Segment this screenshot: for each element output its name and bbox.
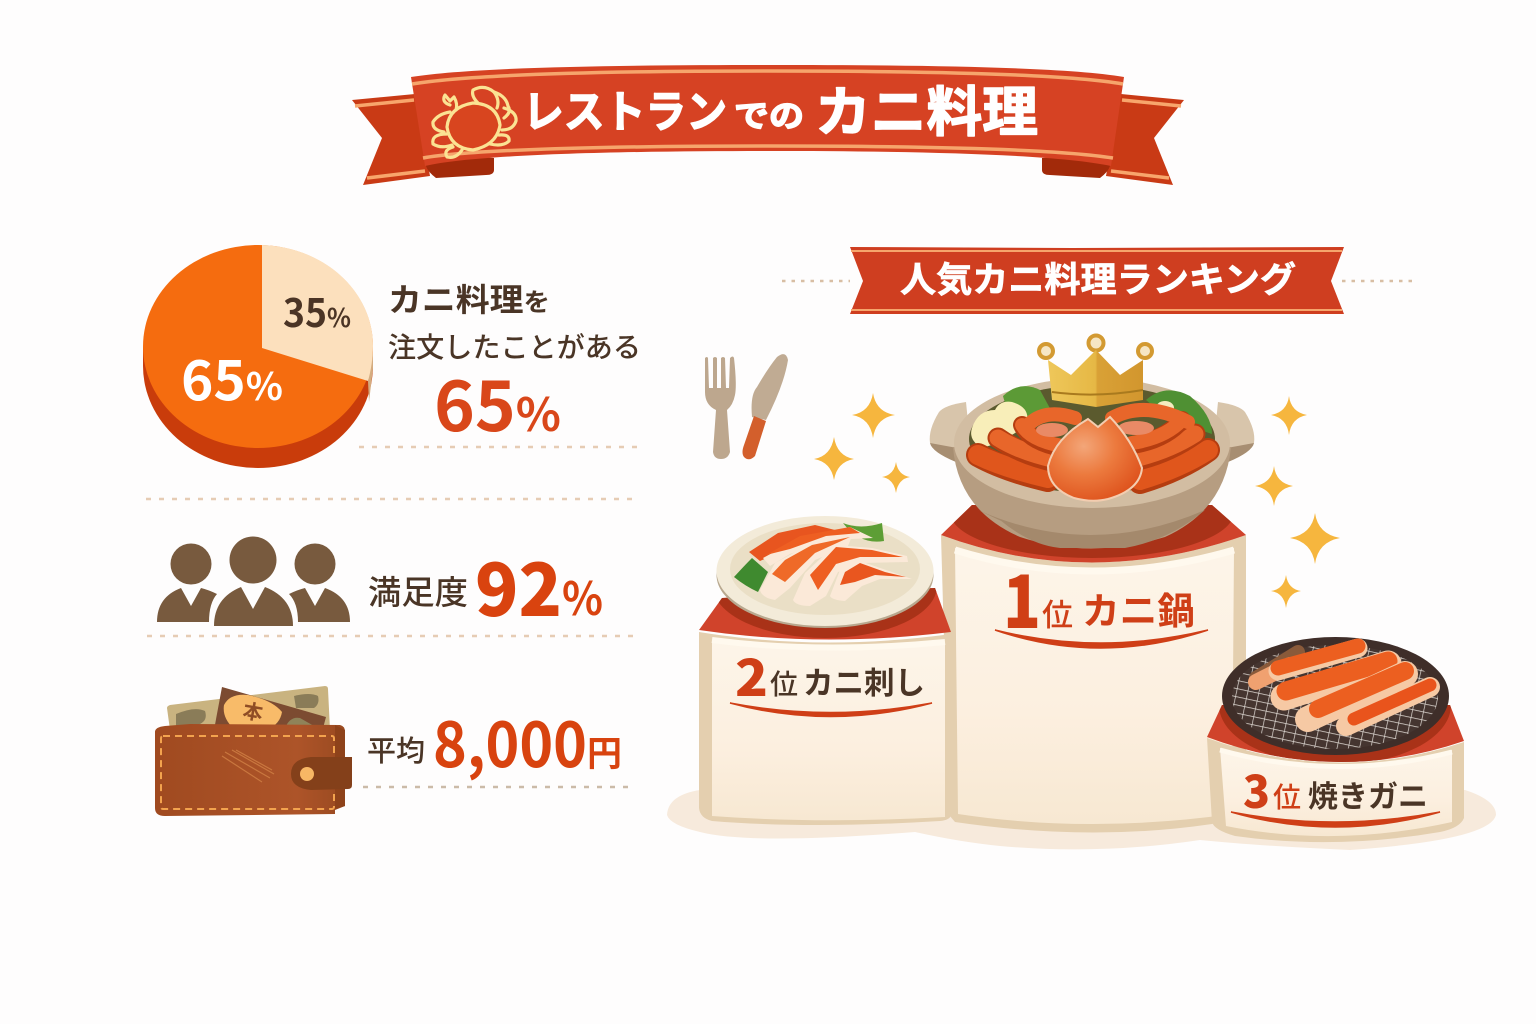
pot handles (930, 402, 972, 462)
icon: wallet with banknotes (155, 686, 352, 816)
rank label (1243, 756, 1428, 821)
pie chart: 65% / 35% (143, 245, 373, 468)
pie side depth (143, 346, 373, 468)
dish: crab hot pot (930, 336, 1254, 548)
crab legs (978, 410, 1208, 482)
podium: 3rd place (1207, 705, 1464, 842)
question text: カニ料理 を (388, 275, 550, 321)
title text: での (734, 91, 804, 136)
rank number: 3 (1243, 756, 1270, 821)
rank suffix: 位 (1042, 590, 1073, 635)
underline (995, 630, 1208, 648)
label: 65%: 65% (181, 337, 283, 416)
podium red top (941, 505, 1246, 562)
stat text: ordered crab dishes (388, 275, 641, 451)
podium: 2nd place (699, 588, 951, 825)
title text: レストラン (523, 76, 727, 140)
rank label (1003, 544, 1195, 649)
banknote back (167, 686, 330, 730)
slice: 35% (262, 245, 373, 381)
podium red top (699, 588, 951, 640)
value: 65%: 65% (434, 352, 561, 451)
icon: fork and knife (705, 354, 788, 459)
heading text: 人気カニ料理ランキング (900, 252, 1296, 303)
pot body (953, 447, 1231, 548)
rank number: 1 (1003, 544, 1041, 649)
crab shell (1048, 417, 1142, 501)
icon: wallet with banknotes: 本 (241, 695, 266, 727)
crab sticks (1256, 646, 1430, 726)
podium body (1207, 738, 1464, 842)
label: 平均 (367, 728, 425, 770)
fork (705, 356, 736, 459)
sparkles (814, 393, 1340, 608)
pot rim (954, 378, 1230, 508)
underline (1231, 812, 1440, 827)
ranking heading ribbon (850, 247, 1344, 314)
label: 満足度 (368, 566, 468, 614)
wallet body (155, 724, 345, 816)
plate (716, 522, 934, 628)
podium floor shadow (667, 790, 1496, 850)
title text (523, 68, 1038, 147)
question text line 2: 注文したことがある (388, 326, 641, 366)
stat: satisfaction 92% (368, 532, 603, 637)
title ribbon (352, 65, 1184, 185)
grill mesh (1232, 645, 1438, 749)
icon: three people (157, 536, 350, 626)
left ribbon tail (352, 94, 494, 185)
slice: 65% (143, 245, 373, 448)
grill plate (1222, 637, 1449, 755)
rank label (735, 639, 925, 711)
dish name: カニ刺し (803, 658, 925, 703)
stat: average price 8,000 yen (367, 695, 622, 785)
podium body (699, 632, 951, 825)
rank number: 2 (735, 639, 768, 711)
label: 35%: 35% (283, 283, 351, 339)
knife (752, 354, 788, 420)
wallet clasp (291, 757, 352, 790)
value: 8,000 (433, 695, 587, 785)
crab sticks (749, 525, 912, 606)
title text: カニ料理 (815, 68, 1038, 147)
icon: crab outline (433, 87, 516, 157)
dish name: 焼きガニ (1308, 772, 1428, 816)
right ribbon tail (1042, 94, 1184, 185)
underline (730, 703, 932, 716)
ribbon shape (850, 247, 1344, 314)
podium red top (1207, 705, 1464, 762)
claw inner (1036, 423, 1068, 437)
value: 92 (475, 532, 562, 637)
rank suffix: 位 (770, 663, 798, 703)
banknote front (214, 687, 326, 732)
dish: grilled crab on grill (1222, 637, 1449, 755)
crown (1039, 336, 1152, 407)
garnish leaves (734, 558, 768, 592)
main ribbon band (411, 65, 1124, 166)
podium body (941, 535, 1246, 833)
dish name: カニ鍋 (1082, 581, 1195, 635)
dish: crab sashimi plate (716, 516, 934, 628)
rank suffix: 位 (1273, 776, 1301, 816)
yen sign: 円 (587, 726, 622, 777)
podium: 1st place (941, 505, 1246, 832)
percent sign: % (562, 563, 603, 629)
vegetables (1003, 386, 1052, 422)
